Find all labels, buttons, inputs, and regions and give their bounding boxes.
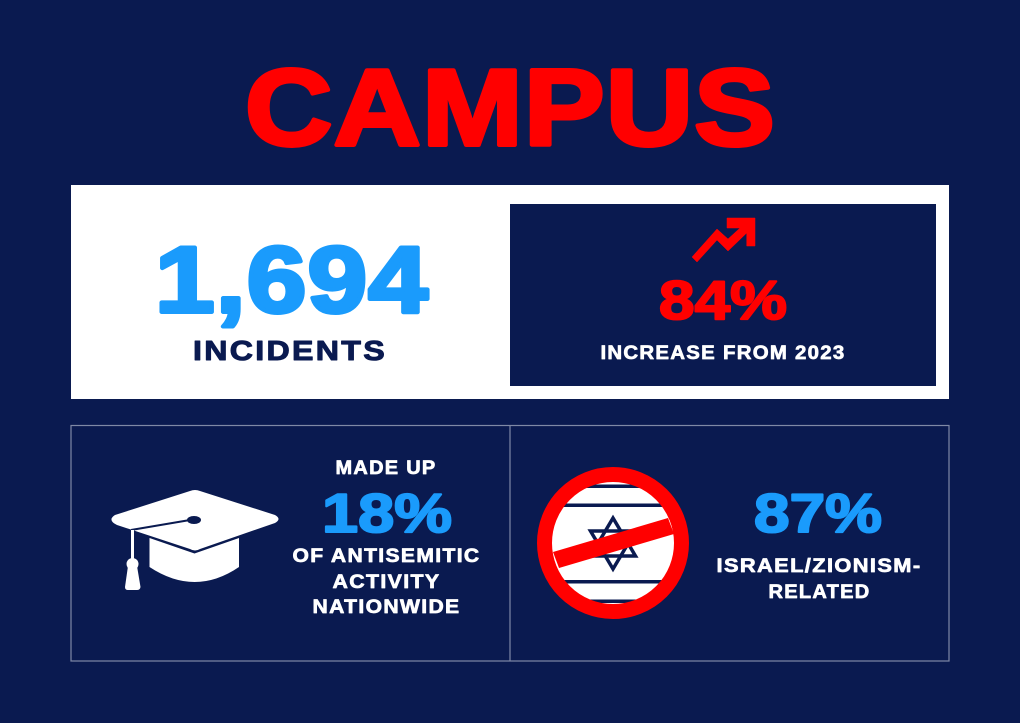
text: made up: MADE UP <box>336 458 436 479</box>
icon: prohibited Israeli flag <box>544 474 682 612</box>
increase label: INCREASE FROM 2023 <box>600 342 846 364</box>
text: Israel/Zionism-related: RELATED <box>768 582 870 603</box>
icon: graduation cap <box>111 490 278 590</box>
share percentage: 18% <box>322 482 452 544</box>
related percentage: 87% <box>754 482 882 544</box>
text: of antisemitic activity nationwide: OF ANTISEMITIC <box>292 546 480 567</box>
panel: total incidents and increase <box>71 185 949 399</box>
panel: breakdown statistics <box>71 425 949 661</box>
text: of antisemitic activity nationwide: NATIONWIDE <box>312 597 460 618</box>
text: Israel/Zionism-related: ISRAEL/ZIONISM- <box>716 556 922 577</box>
incidents label: INCIDENTS <box>193 335 387 366</box>
icon: rising arrow <box>692 218 755 262</box>
title: CAMPUS <box>245 47 776 169</box>
text: of antisemitic activity nationwide: ACTIVITY <box>332 572 440 593</box>
text: Israel/Zionism-related <box>716 556 922 603</box>
panel: increase from 2023 <box>510 204 936 386</box>
increase percentage: 84% <box>659 269 787 331</box>
text: of antisemitic activity nationwide <box>292 546 480 618</box>
incidents count: 1,694 <box>155 227 429 332</box>
